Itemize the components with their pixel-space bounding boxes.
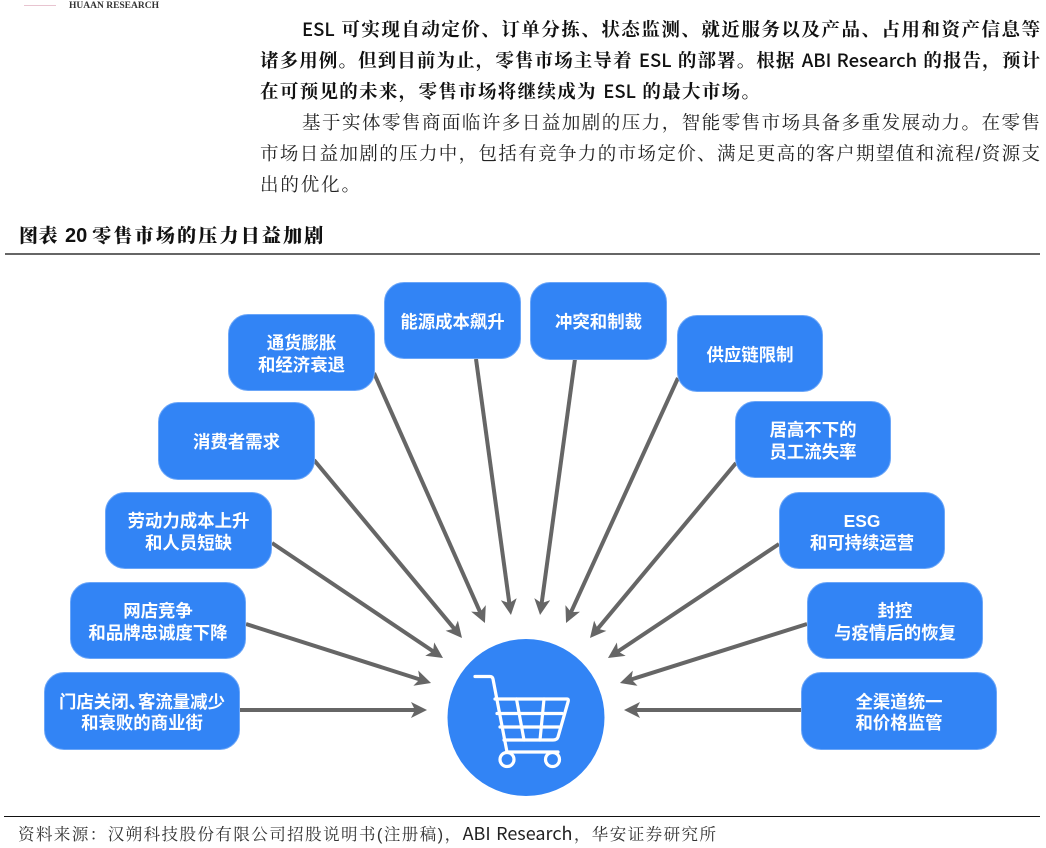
- chart title: 图表 20 零售市场的压力日益加剧: [19, 225, 325, 247]
- box: energy costs: 能源成本飙升: [400, 312, 505, 332]
- box: inflation and recession: [228, 314, 375, 391]
- box: conflict and sanctions: 冲突和制裁: [555, 312, 642, 332]
- source note: 资料来源：汉朔科技股份有限公司招股说明书(注册稿)，ABI Research，华安证券研究所: [18, 820, 716, 846]
- body paragraph 2: 基于实体零售商面临许多日益加剧的压力，智能零售市场具备多重发展动力。在零售: [302, 112, 1040, 133]
- arrow: conflict and sanctions: [541, 359, 575, 605]
- arrow: online competition: [246, 624, 422, 680]
- body paragraph 2: 市场日益加剧的压力中，包括有竞争力的市场定价、满足更高的客户期望值和流程/资源支: [260, 143, 1040, 164]
- arrow: inflation: [374, 373, 481, 614]
- box: supply chain limits: 供应链限制: [707, 345, 793, 365]
- arrow: staff turnover: [596, 463, 736, 630]
- box: energy costs: [384, 282, 521, 359]
- box: lockdown recovery: 与疫情后的恢复: [834, 622, 956, 642]
- body paragraph 2: [260, 112, 1040, 195]
- box: staff turnover: [735, 401, 891, 478]
- arrow: ESG: [616, 544, 779, 652]
- body paragraph 1: ESL 可实现自动定价、订单分拣、状态监测、就近服务以及产品、占用和资产信息等: [302, 16, 1040, 42]
- box: inflation and recession: 和经济衰退: [258, 354, 345, 374]
- body paragraph 1: 在可预见的未来，零售市场将继续成为 ESL 的最大市场。: [260, 78, 760, 104]
- arrow: energy costs: [476, 359, 510, 605]
- box: omnichannel pricing: [801, 672, 997, 750]
- icon: shopping cart in blue circle: [448, 639, 604, 796]
- arrow: labor costs: [272, 543, 435, 652]
- box: ESG: 和可持续运营: [810, 532, 914, 552]
- box: ESG: ESG: [844, 511, 880, 531]
- box: conflict and sanctions: [530, 282, 667, 360]
- box: store closures: [44, 672, 240, 750]
- box: labor costs: [105, 492, 272, 569]
- box: lockdown recovery: [807, 582, 983, 659]
- box: online competition: [70, 582, 246, 659]
- box: supply chain limits: [677, 315, 823, 392]
- box: ESG: [779, 492, 945, 569]
- box: consumer demand: [158, 402, 315, 480]
- arrow: consumer demand: [314, 460, 456, 630]
- box: consumer demand: 消费者需求: [193, 432, 280, 452]
- arrow: lockdown recovery: [630, 624, 807, 680]
- body paragraph 1: [260, 16, 1040, 104]
- box: store closures: 门店关闭、客流量减少: [59, 692, 225, 712]
- arrow: store closures: [240, 708, 417, 712]
- box: labor costs: 劳动力成本上升: [128, 511, 249, 531]
- box: online competition: 网店竞争: [123, 601, 193, 621]
- body paragraph 2: 出的优化。: [260, 174, 360, 195]
- box: store closures: 和衰败的商业街: [81, 713, 203, 733]
- box: staff turnover: 居高不下的: [770, 420, 856, 440]
- box: omnichannel pricing: 全渠道统一: [856, 692, 942, 712]
- box: labor costs: 和人员短缺: [145, 532, 232, 552]
- arrow: supply chain: [570, 378, 678, 614]
- body paragraph 1: 诸多用例。但到目前为止，零售市场主导着 ESL 的部署。根据 ABI Research 的报告，预计: [260, 47, 1040, 73]
- box: online competition: 和品牌忠诚度下降: [88, 622, 228, 642]
- arrow: omnichannel: [634, 708, 801, 712]
- box: omnichannel pricing: 和价格监管: [856, 713, 942, 733]
- box: staff turnover: 员工流失率: [770, 442, 856, 462]
- box: inflation and recession: 通货膨胀: [267, 333, 336, 353]
- box: lockdown recovery: 封控: [878, 601, 912, 621]
